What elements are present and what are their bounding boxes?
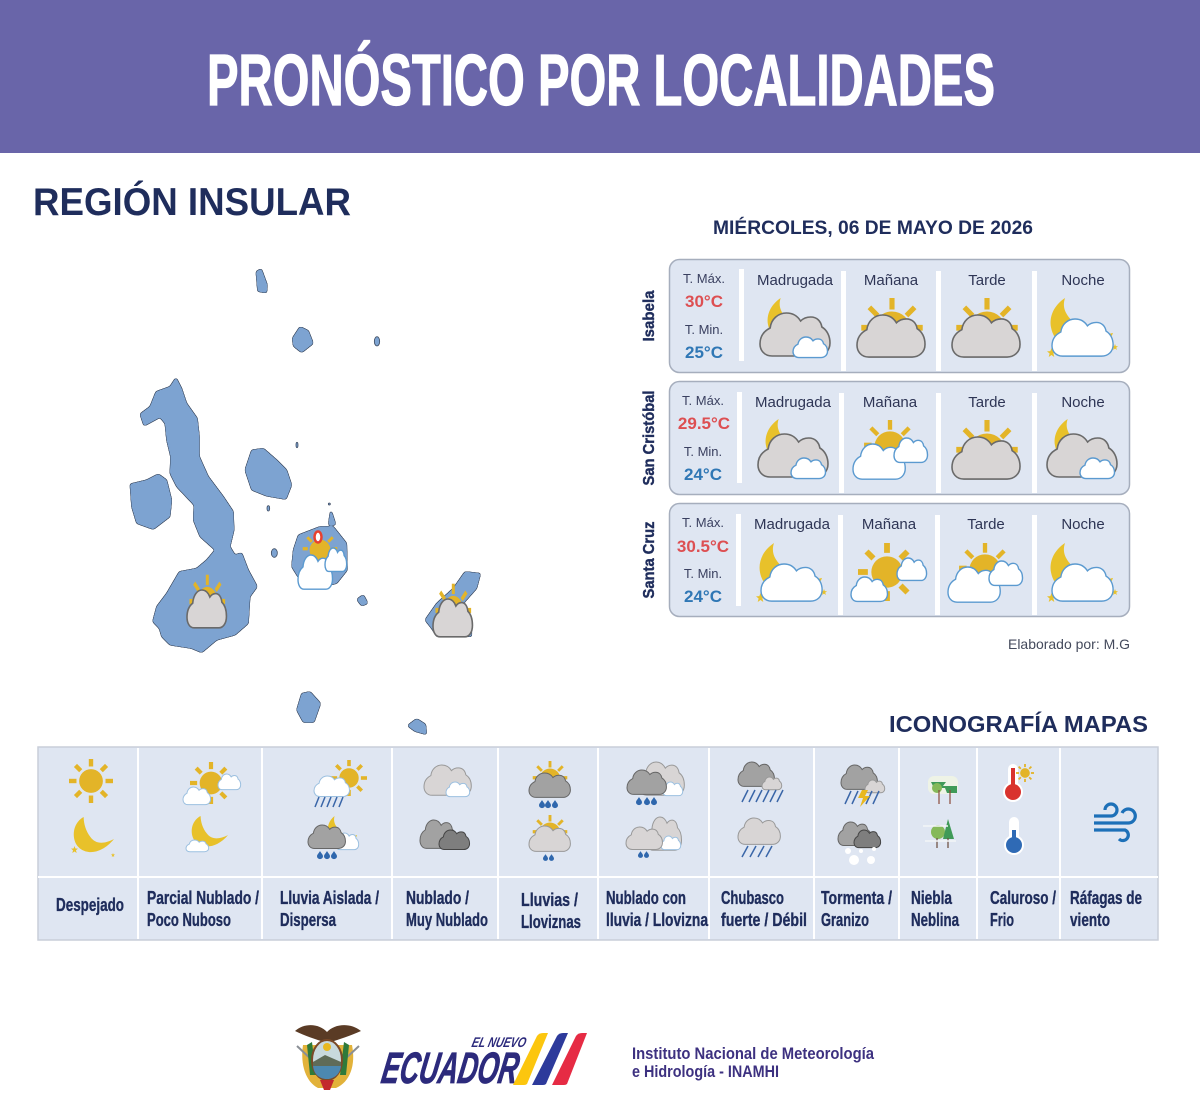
legend item: Niebla: Neblina <box>911 910 960 930</box>
temperatures: Santa Cruz <box>677 515 729 606</box>
legend item: Tormenta <box>821 765 892 930</box>
icon: San Cristóbal noche <box>1047 419 1117 479</box>
legend item: Niebla <box>911 776 960 930</box>
panel: San Cristóbal: Noche <box>1061 394 1105 411</box>
legend item: Lluvia Aislada: Lluvia Aislada / <box>280 888 379 908</box>
icon: Santa Cruz tarde <box>948 543 1023 602</box>
legend item: Nublado con lluvia: Nublado con <box>606 888 686 908</box>
map: Galápagos islands <box>130 269 481 735</box>
header banner <box>0 0 1200 153</box>
temperatures: San Cristóbal: 29.5°C <box>678 414 730 433</box>
legend item: Niebla: Niebla <box>911 888 953 908</box>
icon: San Cristóbal map weather <box>433 584 472 637</box>
legend item: Chubasco: Chubasco <box>721 888 784 908</box>
panel: Santa Cruz: Tarde <box>967 516 1005 533</box>
author credit: Elaborado por: M.G <box>1008 636 1130 652</box>
label: San Cristóbal: San Cristóbal <box>641 390 658 486</box>
legend item: Nublado <box>406 765 488 930</box>
institute name <box>632 1044 874 1081</box>
panel: San Cristóbal <box>670 382 1130 494</box>
panel: Santa Cruz: Mañana <box>862 516 917 533</box>
icon: Isabela noche <box>1047 298 1118 357</box>
temperatures: Isabela: 25°C <box>685 343 723 362</box>
temperatures: San Cristóbal <box>678 393 730 484</box>
icon: San Cristóbal tarde <box>952 420 1020 479</box>
panel: San Cristóbal: Madrugada <box>755 394 832 411</box>
icon: Santa Cruz mañana <box>851 543 927 601</box>
legend item: Parcial Nublado: Parcial Nublado / <box>147 888 259 908</box>
panel: Santa Cruz: Noche <box>1061 516 1105 533</box>
legend item: Lluvia Aislada: Dispersa <box>280 910 337 930</box>
panel: Isabela: Madrugada <box>757 272 834 289</box>
legend item: Caluroso / Frio: Frio <box>990 910 1014 930</box>
institute name: Instituto Nacional de Meteorología <box>632 1044 874 1063</box>
icon: Santa Cruz map weather <box>298 532 347 589</box>
legend item: Lluvias: Lloviznas <box>521 912 581 932</box>
temperatures: Isabela <box>683 271 725 362</box>
temperatures: Santa Cruz: T. Min. <box>684 566 722 581</box>
legend item: Nublado con lluvia: lluvia / Llovizna <box>606 910 709 930</box>
panel: San Cristóbal: Mañana <box>863 394 918 411</box>
institute name: e Hidrología - INAMHI <box>632 1062 779 1081</box>
icon: San Cristóbal mañana <box>853 420 928 479</box>
panel: Isabela: Mañana <box>864 272 919 289</box>
legend item: Lluvias: Lluvias / <box>521 890 578 910</box>
temperatures: Santa Cruz: 24°C <box>684 587 722 606</box>
legend item: Parcial Nublado <box>147 762 259 930</box>
legend item: Ráfagas de viento: viento <box>1070 910 1110 930</box>
temperatures: Isabela: 30°C <box>685 292 723 311</box>
temperatures: Santa Cruz: T. Máx. <box>682 515 724 530</box>
legend item: Parcial Nublado: Poco Nuboso <box>147 910 231 930</box>
temperatures: Isabela: T. Min. <box>685 322 723 337</box>
legend item: Ráfagas de viento <box>1070 804 1142 930</box>
temperatures: San Cristóbal: T. Min. <box>684 444 722 459</box>
legend item: Despejado <box>56 759 124 915</box>
panel: Santa Cruz <box>670 504 1130 616</box>
panel: Isabela: Tarde <box>968 272 1006 289</box>
panel: Isabela <box>670 260 1130 372</box>
legend item: Lluvia Aislada <box>280 760 379 930</box>
label: Santa Cruz: Santa Cruz <box>641 522 658 598</box>
logo: El Nuevo Ecuador: ECUADOR <box>378 1044 523 1093</box>
icon: Isabela mañana <box>857 298 925 357</box>
legend item: Chubasco <box>721 762 807 930</box>
legend item: Despejado: Despejado <box>56 895 124 915</box>
temperatures: San Cristóbal: T. Máx. <box>682 393 724 408</box>
legend item: Chubasco: fuerte / Débil <box>721 910 807 930</box>
icon: Santa Cruz noche <box>1047 543 1118 602</box>
legend heading: ICONOGRAFÍA MAPAS <box>889 710 1148 737</box>
panel: Isabela: Noche <box>1061 272 1105 289</box>
legend table <box>38 747 1158 940</box>
legend item: Nublado con lluvia <box>606 762 709 930</box>
legend item: Tormenta: Granizo <box>821 910 869 930</box>
legend item: Tormenta: Tormenta / <box>821 888 892 908</box>
icon: San Cristóbal madrugada <box>758 419 828 479</box>
icon: Isabela tarde <box>952 298 1020 357</box>
legend item: Caluroso / Frio <box>990 764 1056 930</box>
legend item: Nublado: Nublado / <box>406 888 469 908</box>
icon: Santa Cruz madrugada <box>756 543 827 602</box>
legend item: Ráfagas de viento: Ráfagas de <box>1070 888 1142 908</box>
legend item: Nublado: Muy Nublado <box>406 910 488 930</box>
temperatures: San Cristóbal: 24°C <box>684 465 722 484</box>
temperatures: Isabela: T. Máx. <box>683 271 725 286</box>
logo: coat of arms <box>295 1025 361 1090</box>
icon: Isabela map weather <box>187 575 226 628</box>
legend item: Lluvias <box>521 761 581 932</box>
region heading: REGIÓN INSULAR <box>33 180 351 224</box>
map marker <box>314 532 322 542</box>
icon: Isabela madrugada <box>760 298 830 358</box>
panel: Santa Cruz: Madrugada <box>754 516 831 533</box>
date heading: MIÉRCOLES, 06 DE MAYO DE 2026 <box>713 217 1033 239</box>
label: Isabela: Isabela <box>641 290 658 342</box>
logo: El Nuevo Ecuador: EL NUEVO <box>470 1035 528 1051</box>
legend item: Caluroso / Frio: Caluroso / <box>990 888 1056 908</box>
temperatures: Santa Cruz: 30.5°C <box>677 537 729 556</box>
panel: San Cristóbal: Tarde <box>968 394 1006 411</box>
